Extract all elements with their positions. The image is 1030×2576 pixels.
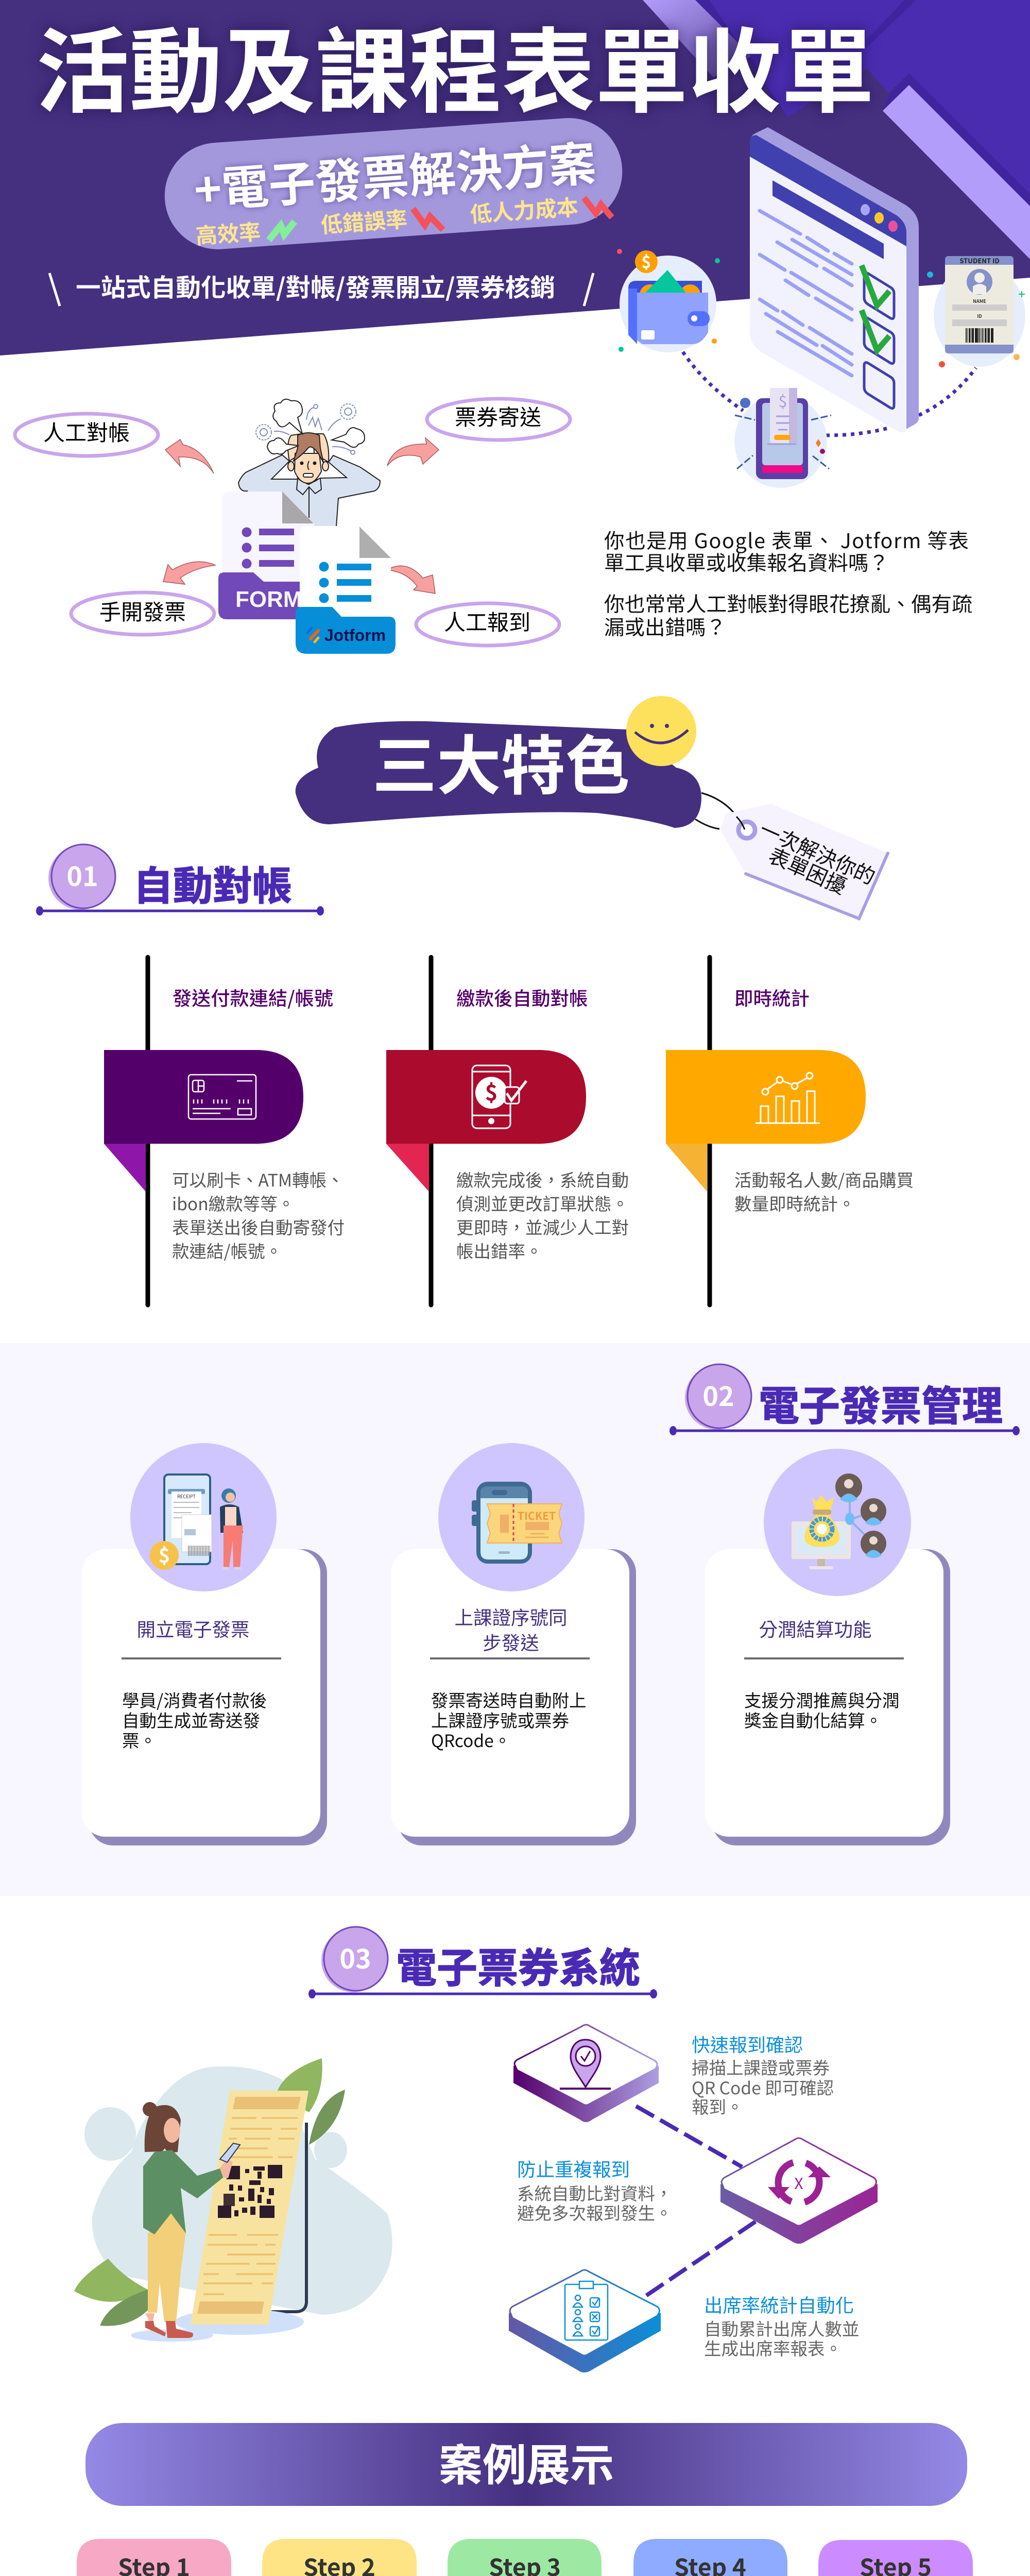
section heading 02: 電子發票管理 — [759, 1373, 1003, 1432]
banner tab — [386, 1050, 586, 1144]
arrow: to bottom right — [387, 566, 435, 594]
tag: solves form troubles — [695, 793, 888, 919]
intro question text: 漏或出錯嗎？ — [604, 612, 726, 641]
icon: form browser window — [750, 127, 919, 432]
oval: manual check-in: 人工報到 — [444, 605, 530, 637]
icon: smiley — [626, 696, 696, 766]
description — [734, 1166, 914, 1215]
text: prevent duplicates — [517, 2155, 673, 2225]
card body: QRcode。 — [431, 1727, 511, 1752]
diamond: quick check-in — [513, 2025, 659, 2122]
description: 偵測並更改訂單狀態。 — [456, 1190, 629, 1215]
subtitle pill — [161, 114, 626, 253]
text: quick check-in: 掃描上課證或票券 — [692, 2054, 830, 2079]
step 2 — [262, 2539, 417, 2576]
icon: red down arrow — [413, 209, 443, 230]
icon: credit card — [188, 1075, 256, 1119]
column heading: 繳款後自動對帳 — [456, 984, 588, 1011]
section heading 01 — [36, 844, 324, 916]
banner: case studies — [85, 2423, 967, 2506]
oval: manual invoicing — [71, 592, 214, 635]
icon: red down arrow — [584, 198, 612, 217]
text: attendance stats: 生成出席率報表。 — [704, 2335, 842, 2360]
icon: money bag and network — [792, 1473, 886, 1569]
description: 繳款完成後，系統自動 — [456, 1166, 629, 1192]
figure: stressed man — [238, 399, 380, 527]
oval: manual reconciliation: 人工對帳 — [43, 416, 130, 447]
column: send payment link — [104, 957, 345, 1305]
intro question text: 單工具收單或收集報名資料嗎？ — [604, 547, 889, 577]
section heading 03: 電子票券系統 — [396, 1935, 640, 1994]
card body: 支援分潤推薦與分潤 — [744, 1687, 899, 1712]
card title: 開立電子發票 — [137, 1615, 249, 1642]
icon: phone with receipt: $ — [779, 389, 787, 412]
illustration: stressed man with forms — [15, 399, 570, 654]
card title: 上課證序號同 — [454, 1603, 568, 1630]
icon: refresh cross — [768, 2156, 831, 2209]
icon: student id card: STUDENT ID — [959, 256, 1000, 265]
text: prevent duplicates: 避免多次報到發生。 — [517, 2199, 673, 2225]
heading: three features: 三大特色 — [372, 714, 630, 807]
hero background — [0, 0, 1030, 355]
icon: Jotform document — [296, 526, 396, 654]
text: quick check-in — [692, 2030, 834, 2119]
card: issue e-invoice — [82, 1443, 327, 1845]
icon: student id card — [927, 256, 1025, 367]
intro question text — [604, 525, 972, 641]
icon: student id card: NAME — [973, 298, 986, 304]
section heading 03 — [308, 1927, 657, 1998]
icon: phone with ticket — [472, 1482, 562, 1564]
oval: manual invoicing: 手開發票 — [99, 595, 186, 626]
banner: case studies: 案例展示 — [439, 2430, 614, 2494]
illustration: online form with connected circles — [617, 127, 1025, 488]
description: 更即時，並減少人工對 — [456, 1214, 629, 1239]
card title: 步發送 — [483, 1628, 539, 1655]
tag: solves form troubles: 表單困擾 — [764, 839, 852, 900]
banner tab — [104, 1050, 303, 1144]
heading: three features — [296, 696, 888, 919]
section heading 01: 自動對帳 — [133, 855, 292, 912]
text: prevent duplicates: 系統自動比對資料， — [517, 2180, 673, 2205]
intro question text: 你也常常人工對帳對得眼花撩亂、偶有疏 — [604, 588, 972, 618]
pill headline: +電子發票解決方案 — [192, 126, 598, 222]
step 5 — [818, 2540, 973, 2576]
card body — [122, 1687, 267, 1752]
icon: wallet: $ — [642, 249, 651, 273]
icon: green up arrow — [269, 222, 295, 240]
text: quick check-in: QR Code 即可確認 — [692, 2074, 834, 2099]
description: 帳出錯率。 — [456, 1238, 543, 1263]
icon: refresh cross: X — [794, 2171, 803, 2194]
description: 可以刷卡、ATM轉帳、 — [172, 1166, 344, 1192]
card: revenue share — [705, 1449, 950, 1845]
section heading 02: 02 — [702, 1375, 734, 1414]
icon: phone receipt and person: $ — [159, 1540, 170, 1568]
card: send with course pass — [391, 1443, 636, 1845]
column: live statistics — [666, 957, 914, 1305]
arrow: to top right — [387, 438, 439, 466]
icon: wallet — [617, 249, 720, 352]
section heading 02 — [670, 1364, 1020, 1435]
icon: phone receipt and person: RECEIPT — [177, 1493, 196, 1500]
intro question text: 你也是用 Google 表單、 Jotform 等表 — [604, 525, 969, 554]
section heading 03: 03 — [339, 1938, 371, 1976]
section heading 01: 01 — [66, 855, 98, 894]
arrow: to top left — [165, 439, 214, 473]
arrow: to bottom left — [163, 562, 215, 584]
panel: e-invoice management — [0, 1343, 1030, 1896]
icon: phone with payment check: $ — [485, 1076, 497, 1107]
card body: 發票寄送時自動附上 — [431, 1687, 586, 1712]
card body: 上課證序號或票券 — [431, 1707, 569, 1732]
description: 活動報名人數/商品購買 — [734, 1166, 914, 1192]
benefit: low labour cost: 低人力成本 — [469, 190, 579, 229]
text: quick check-in: 報到。 — [692, 2093, 744, 2119]
icon: location pin — [560, 2040, 611, 2089]
card body — [744, 1687, 899, 1732]
figure: woman — [143, 2102, 240, 2338]
icon: Jotform document: Jotform — [324, 626, 386, 645]
text: attendance stats: 自動累計出席人數並 — [704, 2315, 859, 2341]
step 1 — [77, 2539, 231, 2576]
icon: attendance clipboard — [565, 2281, 608, 2340]
text: attendance stats: 出席率統計自動化 — [704, 2291, 854, 2318]
card title — [454, 1603, 568, 1655]
description — [172, 1166, 345, 1263]
oval: manual check-in — [416, 603, 559, 646]
icon: FORM document: FORM — [235, 587, 302, 612]
benefit: high efficiency: 高效率 — [195, 215, 262, 250]
icon: phone with payment check — [472, 1065, 526, 1128]
icon: phone with ticket: TICKET — [518, 1508, 556, 1523]
card title: 分潤結算功能 — [759, 1615, 871, 1642]
text: quick check-in: 快速報到確認 — [692, 2030, 803, 2057]
description: ibon繳款等等。 — [172, 1190, 295, 1215]
column heading: 發送付款連結/帳號 — [173, 983, 333, 1011]
diamond: attendance stats — [509, 2270, 661, 2372]
tagline: 一站式自動化收單/對帳/發票開立/票券核銷 — [76, 267, 555, 303]
oval: manual reconciliation — [15, 414, 158, 456]
card body — [431, 1687, 586, 1752]
oval: ticket mailing — [427, 399, 570, 440]
card body: 自動生成並寄送發 — [122, 1707, 260, 1732]
ticket receipt with QR — [191, 2091, 308, 2325]
illustration: woman scanning ticket — [74, 2058, 392, 2342]
column heading: 即時統計 — [734, 984, 810, 1011]
diamond: prevent duplicates — [720, 2138, 878, 2244]
text: prevent duplicates: 防止重複報到 — [517, 2155, 630, 2182]
description: 款連結/帳號。 — [172, 1238, 282, 1263]
icon: phone receipt and person — [150, 1475, 243, 1570]
dashed connectors — [636, 2106, 756, 2299]
banner tab — [666, 1050, 866, 1144]
description — [456, 1166, 629, 1263]
text: attendance stats — [704, 2291, 859, 2360]
benefit: low error: 低錯誤率 — [320, 202, 408, 240]
step 4 — [633, 2539, 787, 2576]
icon: growth chart — [756, 1073, 820, 1123]
icon: phone with receipt — [734, 388, 831, 488]
icon: student id card: ID — [977, 313, 982, 319]
step 3 — [448, 2539, 602, 2576]
description: 數量即時統計。 — [734, 1190, 855, 1215]
description: 表單送出後自動寄發付 — [172, 1214, 345, 1239]
icon: FORM document — [218, 492, 314, 619]
title: 活動及課程表單收單 — [36, 0, 874, 131]
card body: 獎金自動化結算。 — [744, 1707, 882, 1732]
column: auto reconciliation — [386, 957, 629, 1305]
tag: solves form troubles: 一次解決你的 — [756, 813, 881, 891]
oval: ticket mailing: 票券寄送 — [455, 400, 541, 432]
card body: 票。 — [122, 1727, 157, 1752]
card body: 學員/消費者付款後 — [122, 1687, 267, 1712]
dotted connector curves — [683, 352, 976, 435]
